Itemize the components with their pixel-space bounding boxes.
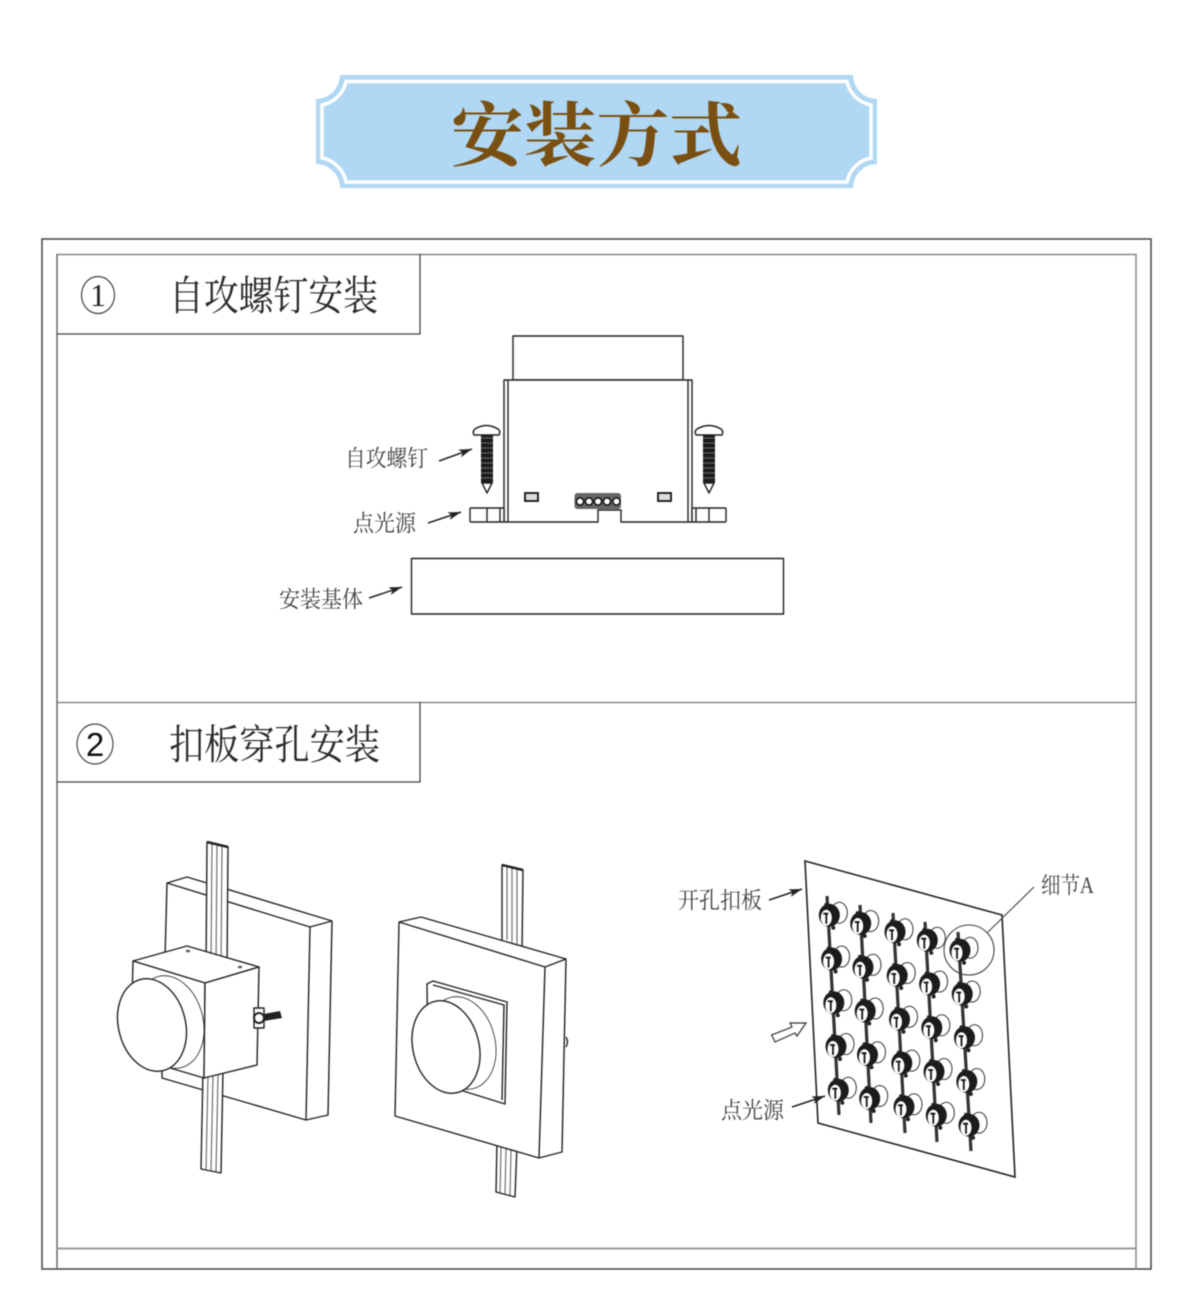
lens front bbox=[108, 971, 196, 1079]
arrow: base bbox=[369, 587, 402, 598]
heading text 2: 扣板穿孔安装 bbox=[169, 722, 380, 768]
left flange bbox=[470, 508, 504, 522]
arrow: perforated panel bbox=[769, 889, 802, 900]
label: point light source: 点光源 bbox=[353, 511, 417, 536]
label: detail A: 细节A bbox=[1041, 873, 1094, 898]
title banner bbox=[316, 75, 877, 188]
diagram: fixture mounted on panel bbox=[395, 865, 568, 1197]
lens back rim bbox=[127, 968, 213, 1076]
left screw bbox=[473, 426, 500, 493]
number 1 bbox=[82, 276, 114, 314]
fixture body bbox=[504, 380, 692, 522]
panel bbox=[395, 917, 568, 1158]
screw side bbox=[254, 1008, 282, 1028]
hollow arrow bbox=[772, 1023, 806, 1042]
arrow: point light source 2 bbox=[792, 1096, 825, 1107]
number 1: 1 bbox=[90, 277, 106, 313]
outer frame bbox=[42, 239, 1151, 1269]
heading text 1: 自攻螺钉安装 bbox=[169, 273, 378, 319]
label: perforated panel: 开孔扣板 bbox=[678, 888, 762, 913]
right flange bbox=[692, 508, 726, 522]
leader line bbox=[988, 887, 1034, 932]
label: self-tapping screw: 自攻螺钉 bbox=[345, 446, 428, 471]
detail circle bbox=[944, 925, 994, 975]
diagram: perforated panel with light grid bbox=[772, 861, 1034, 1177]
ribbon cable bottom bbox=[496, 1140, 517, 1197]
square flange bbox=[427, 981, 507, 1104]
wires bbox=[827, 896, 971, 1151]
number 2: 2 bbox=[86, 726, 104, 763]
light grid bbox=[819, 902, 987, 1140]
lens front bbox=[403, 993, 489, 1101]
panel heading: panel through-hole install bbox=[57, 702, 420, 782]
lens back rim bbox=[419, 989, 505, 1097]
fixture top cap bbox=[513, 336, 683, 380]
label: point light source 2: 点光源 bbox=[721, 1098, 785, 1123]
number 2 bbox=[77, 724, 113, 764]
diagram: fixture in front of panel bbox=[108, 842, 332, 1173]
right screw bbox=[695, 426, 723, 493]
arrow: light source bbox=[428, 512, 461, 523]
diagram: front view of fixture with screws bbox=[412, 336, 784, 614]
label: mounting base: 安装基体 bbox=[279, 587, 363, 612]
fixture box bbox=[132, 946, 259, 1078]
arrow: screw bbox=[439, 449, 472, 461]
title text: 安装方式 bbox=[451, 99, 742, 176]
panel sheet bbox=[805, 861, 1015, 1177]
ribbon cable upper bbox=[206, 842, 228, 970]
panel heading: self-tapping screw install bbox=[57, 254, 420, 334]
ribbon cable lower bbox=[201, 1070, 223, 1173]
back plate bbox=[162, 877, 332, 1120]
ribbon cable top bbox=[502, 865, 523, 950]
mounting base bbox=[412, 558, 784, 614]
LED connector bbox=[574, 493, 621, 509]
